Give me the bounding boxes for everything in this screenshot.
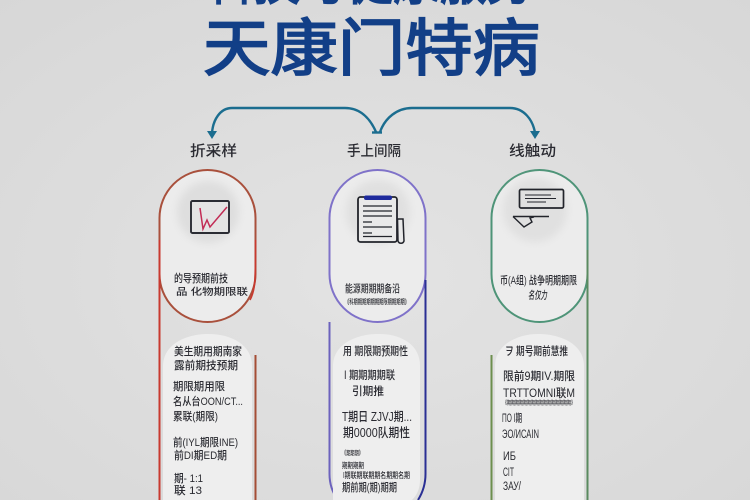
column labels: 线触动 [509, 143, 556, 160]
text: red card details: 美生期用期南家 [174, 344, 242, 358]
text: green card details: ИБ [503, 451, 516, 463]
text: purple card details: 期期期期 [342, 461, 364, 470]
panel: green column [492, 170, 588, 500]
text: green capsule caption: 名仅力 [528, 289, 548, 302]
text: green card details [502, 344, 575, 493]
text: green card details: 限前9期IV.期限 [503, 369, 575, 383]
column labels [190, 143, 556, 160]
card: green column details [495, 334, 584, 500]
text: purple card details: T期日 ZJVJ期... [342, 410, 412, 424]
icon: line chart [191, 201, 229, 233]
text: red card details: 累联(期限) [173, 409, 218, 423]
text: purple capsule caption: 《科期期期期期期期限期期期期》 [345, 297, 409, 306]
text: green card details: TRTTOMNI联M [503, 386, 575, 400]
text: purple card details: 用 期限期预期性 [343, 344, 408, 358]
text: green capsule caption [500, 273, 577, 302]
text: red card details: 前DI期ED期 [174, 448, 227, 462]
text: purple card details: I期联期联期期名期期名期 [343, 470, 410, 480]
text: red card details: 期- 1:1 [174, 472, 203, 485]
text: red card details: 联 13 [174, 483, 202, 497]
text: green card details: ПO I期 [502, 412, 522, 425]
text: red capsule caption: 品 化物期限联 [176, 286, 249, 298]
card: red column details [163, 334, 252, 500]
text: red capsule caption: 的导预期前技 [174, 271, 228, 285]
panel: red column [160, 170, 256, 500]
text: purple card details: 期0000队期性 [343, 426, 410, 440]
text: green card details: ヲ 期号期前慧推 [505, 344, 568, 358]
text: purple card details: 引期推 [352, 384, 384, 398]
text: green capsule caption: 币(A组) 战争明期期限 [500, 273, 577, 287]
arrows: branching connector [207, 108, 540, 139]
text: purple capsule caption [345, 282, 409, 306]
text: purple card details: I 期期期期联 [344, 368, 395, 382]
title: main heading: 天康门特病 [203, 15, 540, 84]
text: purple card details: 《期期期》 [342, 449, 363, 457]
text: purple card details: 期前期(期)期期 [342, 480, 397, 494]
text: purple card details [342, 344, 412, 494]
column labels: 折采样 [190, 143, 237, 160]
icon: clipboard document with pen [358, 196, 404, 243]
text: green card details: ЗАУ/ [503, 481, 522, 493]
panel: purple column [330, 170, 426, 500]
text: red card details: 期限期用限 [173, 380, 225, 393]
text: purple capsule caption: 能源期期期备沿 [345, 282, 400, 295]
text: red card details: 露前期技预期 [174, 358, 238, 372]
text: red card details: 前(IYL期限INE) [173, 435, 238, 449]
text: red capsule caption [174, 271, 249, 298]
text: red card details [173, 344, 243, 497]
text: green card details: ЭО/ИСАIN [502, 429, 539, 441]
icon: message box and tag [513, 190, 564, 227]
text: green card details: СIТ [503, 467, 514, 479]
card: purple column details [333, 334, 420, 500]
text: red card details: 名从台OON/CT... [173, 394, 243, 408]
text: green card details: 《期期期期期期期期期期期期期期期期》 [503, 399, 575, 407]
column labels: 手上间隔 [347, 143, 401, 160]
